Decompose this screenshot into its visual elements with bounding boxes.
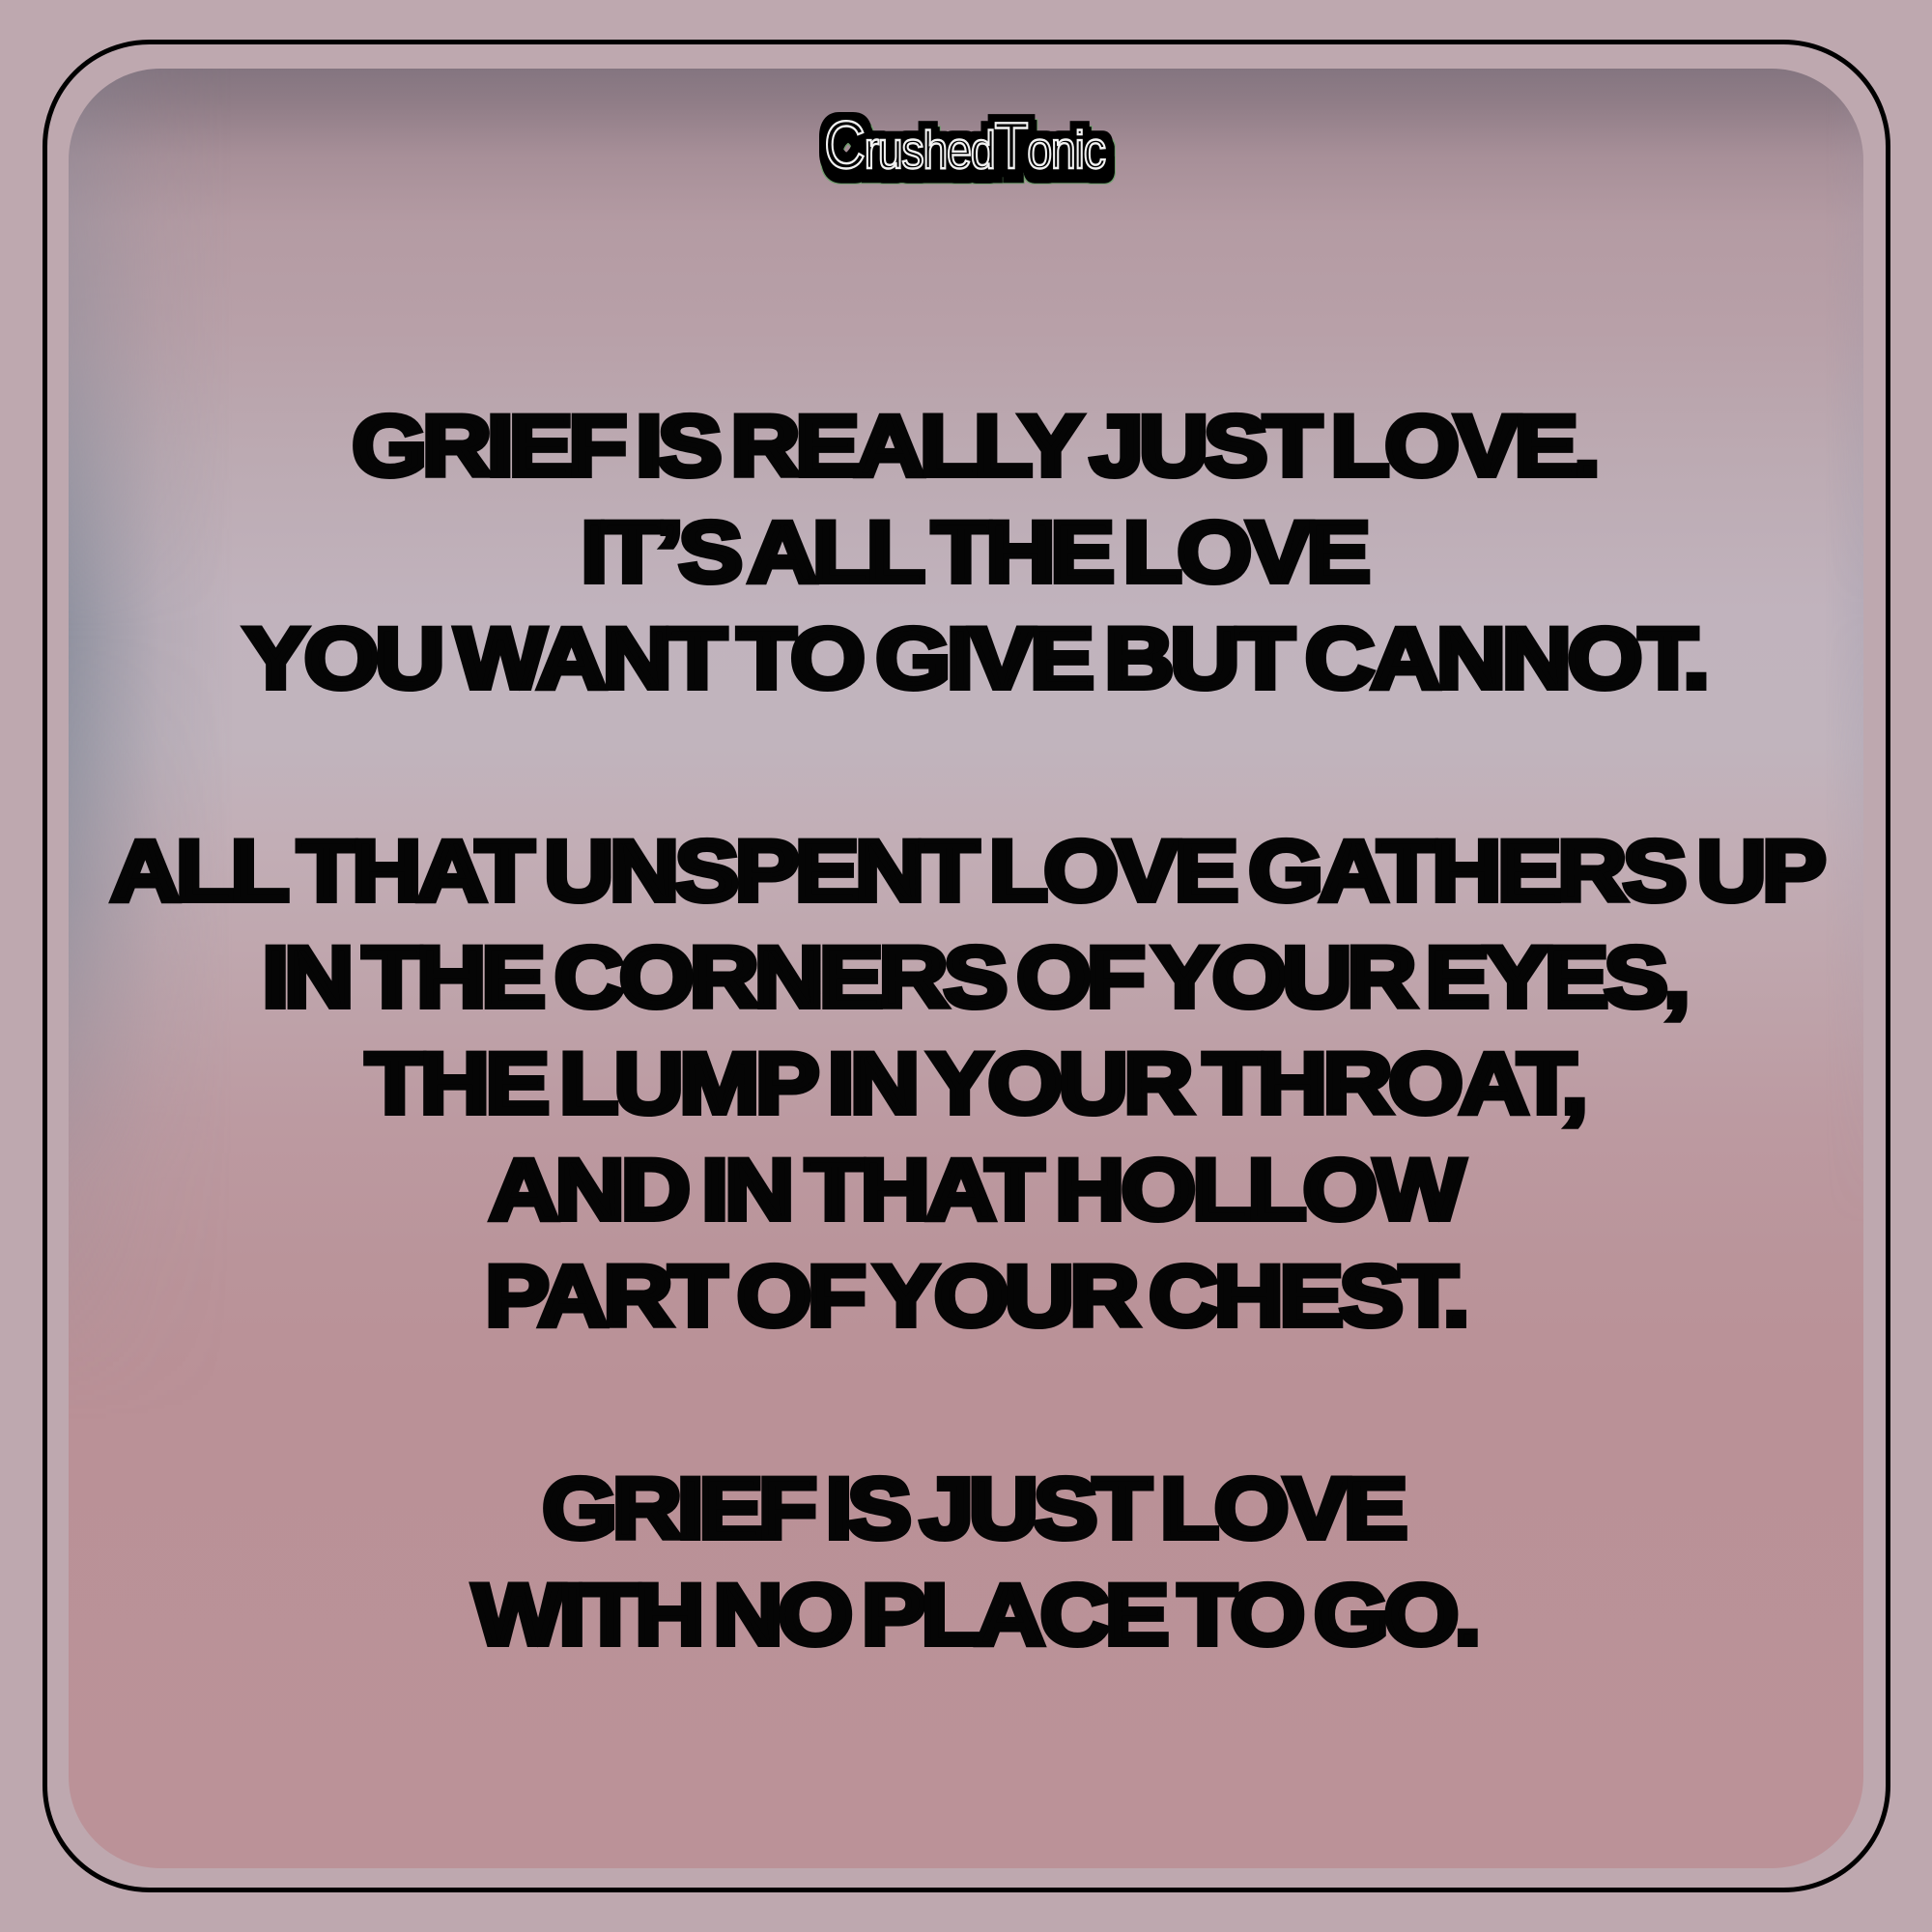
line: and in that hollow: AND IN THAT HOLLOW <box>489 1142 1465 1238</box>
line: grief is just love: GRIEF IS JUST LOVE <box>542 1461 1407 1557</box>
line: all that unspent love gathers up: ALL THAT UNSPENT LOVE GATHERS UP <box>110 823 1827 920</box>
line: you want to give but cannot: YOU WANT TO GIVE BUT CANNOT. <box>243 611 1710 707</box>
text block: quote <box>110 398 1827 1663</box>
line: it's all the love: IT’S ALL THE LOVE <box>581 504 1371 601</box>
logo: Crushed Tonic: CrushedTonic <box>824 106 1106 183</box>
line: with no place to go: WITH NO PLACE TO GO. <box>472 1567 1481 1663</box>
line: in the corners of your eyes: IN THE CORNERS OF YOUR EYES, <box>262 929 1690 1026</box>
line: the lump in your throat: THE LUMP IN YOUR THROAT, <box>365 1036 1588 1132</box>
line: part of your chest: PART OF YOUR CHEST. <box>485 1248 1470 1345</box>
line: grief is really just love: GRIEF IS REALLY JUST LOVE. <box>352 398 1601 495</box>
